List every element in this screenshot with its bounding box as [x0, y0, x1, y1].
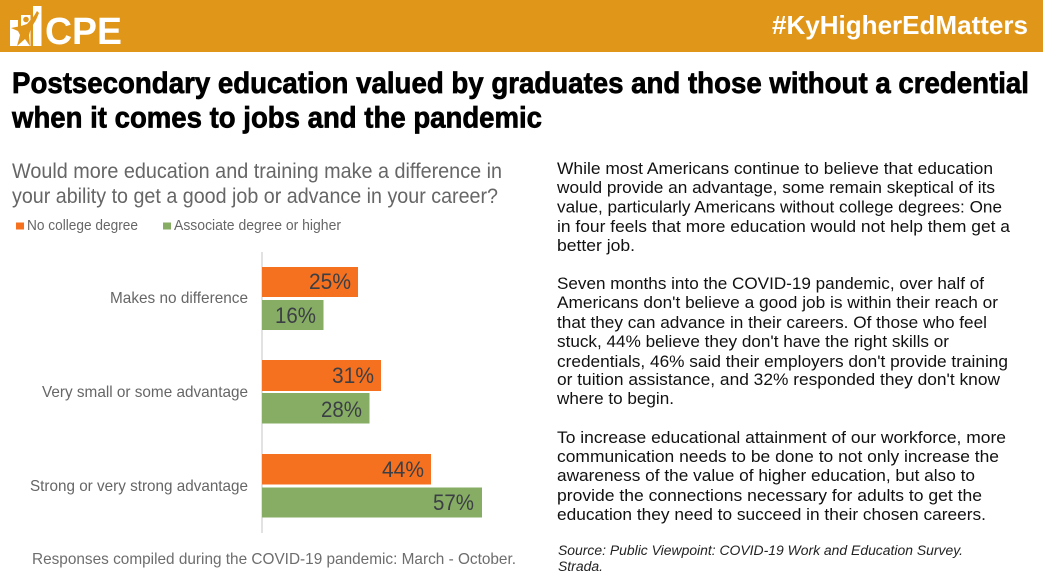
- hashtag: #KyHigherEdMatters: [772, 10, 1028, 40]
- text block: paragraph 2: Americans don't believe a good job is within their reach or: [557, 293, 998, 312]
- source note: Source: Public Viewpoint: COVID-19 Work and Education Survey.: [558, 543, 963, 558]
- text block: paragraph 1: value, particularly Americans without college degrees: One: [557, 198, 1002, 216]
- legend: [16, 217, 341, 234]
- title: [11, 67, 1029, 134]
- text block: paragraph 2: credentials, 46% said their employers don't provide training: [557, 352, 1008, 371]
- bar group: very small or some advantage: [42, 360, 381, 424]
- text block: paragraph 2: that they can advance in their careers. Of those who feel: [557, 313, 987, 332]
- text block: paragraph 1: would provide an advantage, some remain skeptical of its: [556, 178, 995, 197]
- text block: paragraph 3: awareness of the value of higher education, but also to: [557, 466, 975, 485]
- text block: paragraph 1: [556, 159, 1011, 255]
- text block: paragraph 2: or tuition assistance, and 32% responded they don't know: [557, 370, 1001, 389]
- header band: [0, 0, 1043, 53]
- bar group: very small or some advantage: 28%: [321, 397, 362, 422]
- icon: CPE logo mark: [10, 6, 42, 46]
- bar group: very small or some advantage: 31%: [332, 363, 374, 388]
- bar group: makes no difference: 16%: [275, 303, 316, 328]
- text block: paragraph 2: Seven months into the COVID-19 pandemic, over half of: [557, 274, 984, 293]
- legend: No college degree: [27, 217, 138, 234]
- bar group: makes no difference: [110, 267, 358, 330]
- source note: [558, 543, 963, 574]
- text block: paragraph 3: communication needs to be done to not only increase the: [557, 447, 999, 466]
- legend: Associate degree or higher: [174, 217, 341, 234]
- bar group: strong or very strong advantage: 44%: [382, 457, 424, 482]
- chart footnote: Responses compiled during the COVID-19 pandemic: March - October.: [32, 551, 516, 568]
- chart question heading: Would more education and training make a difference in: [12, 160, 502, 183]
- bar group: very small or some advantage: Very small or some advantage: [42, 384, 248, 401]
- text block: paragraph 1: better job.: [557, 236, 635, 255]
- text block: paragraph 1: While most Americans continue to believe that education: [557, 159, 993, 178]
- bar group: strong or very strong advantage: 57%: [433, 490, 474, 515]
- logo wordmark: CPE: [45, 11, 122, 53]
- panel: bar chart: [12, 160, 516, 568]
- source note: Strada.: [558, 559, 603, 574]
- chart axis: [261, 252, 263, 533]
- chart question heading: [12, 160, 502, 208]
- chart question heading: your ability to get a good job or advance in your career?: [12, 185, 498, 208]
- title: when it comes to jobs and the pandemic: [11, 102, 542, 134]
- text block: paragraph 3: provide the connections necessary for adults to get the: [557, 486, 982, 505]
- text block: paragraph 3: [557, 428, 1006, 524]
- text block: paragraph 2: where to begin.: [556, 389, 674, 408]
- bar group: makes no difference: Makes no difference: [110, 290, 248, 307]
- text block: paragraph 3: education they need to succeed in their chosen careers.: [557, 505, 986, 524]
- text block: paragraph 3: To increase educational attainment of our workforce, more: [557, 428, 1006, 447]
- text block: paragraph 2: stuck, 44% believe they don't have the right skills or: [557, 332, 949, 351]
- bar group: strong or very strong advantage: [30, 454, 482, 518]
- bar group: strong or very strong advantage: Strong or very strong advantage: [30, 478, 248, 495]
- text block: paragraph 1: in four feels that more education would not help them get a: [557, 217, 1011, 236]
- text block: paragraph 2: [556, 274, 1008, 408]
- bar group: makes no difference: 25%: [309, 269, 351, 294]
